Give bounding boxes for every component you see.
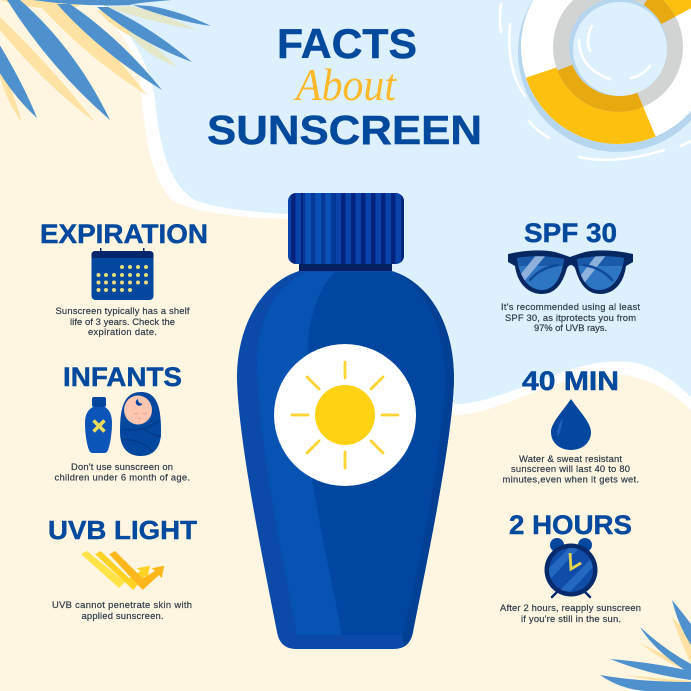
text: 40 min: minutes,even when it gets wet.	[502, 474, 639, 484]
text: 2 hours	[500, 602, 641, 624]
panel: 2 hours: 2 HOURS	[509, 510, 632, 540]
text: expiration	[56, 305, 190, 337]
icon: alarm clock	[544, 538, 598, 597]
panel: 2 hours	[500, 510, 641, 624]
panel: spf 30: SPF 30	[524, 218, 617, 248]
title: FACTS	[277, 20, 417, 67]
sun label	[274, 344, 416, 486]
bottle highlight	[257, 272, 342, 635]
bottle right shade	[392, 271, 454, 646]
sunscreen bottle	[237, 193, 454, 649]
icon: calendar	[92, 248, 154, 300]
title	[207, 20, 482, 153]
palm leaves top left	[0, 0, 211, 122]
palm leaves bottom right	[600, 600, 691, 691]
text: infants	[54, 461, 190, 482]
text: 40 min	[502, 453, 639, 484]
title: About	[293, 59, 397, 110]
text: infants: Don't use sunscreen on	[71, 461, 173, 472]
text: uvb	[52, 599, 192, 621]
bottle neck	[299, 264, 392, 273]
panel: expiration: EXPIRATION	[40, 219, 208, 249]
text: expiration: Sunscreen typically has a shelf	[56, 305, 190, 316]
panel: expiration	[40, 219, 208, 337]
icon: swaddled baby	[120, 392, 161, 456]
bottle cap	[288, 193, 404, 264]
text: spf	[501, 301, 640, 333]
panel: uvb light: UVB LIGHT	[48, 515, 197, 545]
panel: infants	[54, 362, 190, 482]
panel: infants: INFANTS	[63, 362, 182, 392]
bottle centre	[257, 272, 445, 635]
panel: 40 min: 40 MIN	[522, 366, 619, 396]
icon: small bottle	[85, 397, 112, 453]
text: expiration: life of 3 years. Check the	[70, 316, 175, 327]
text: 40 min: Water & sweat resistant	[519, 453, 622, 464]
text: spf: 97% of UVB rays.	[534, 322, 607, 333]
text: infants: children under 6 month of age.	[54, 472, 190, 482]
title: SUNSCREEN	[207, 107, 482, 153]
text: 2 hours: if you're still in the sun.	[521, 613, 621, 624]
text: 40 min: sunscreen will last 40 to 80	[511, 463, 630, 474]
text: 2 hours: After 2 hours, reapply sunscreen	[500, 602, 641, 613]
icon: water drop	[551, 399, 591, 450]
text: expiration: expiration date.	[88, 326, 157, 337]
panel: 40 min	[502, 366, 639, 484]
panel: uvb light	[48, 515, 197, 621]
text: uvb: applied sunscreen.	[82, 610, 164, 621]
bottle body	[237, 271, 454, 649]
icon: sunglasses	[508, 250, 633, 295]
swim ring	[498, 0, 691, 161]
text: uvb: UVB cannot penetrate skin with	[52, 599, 192, 610]
panel: spf 30	[501, 218, 640, 333]
text: spf: It's recommended using al least	[501, 301, 640, 312]
text: spf: SPF 30, as itprotects you from	[505, 312, 636, 323]
icon: uvb rays	[81, 551, 164, 590]
